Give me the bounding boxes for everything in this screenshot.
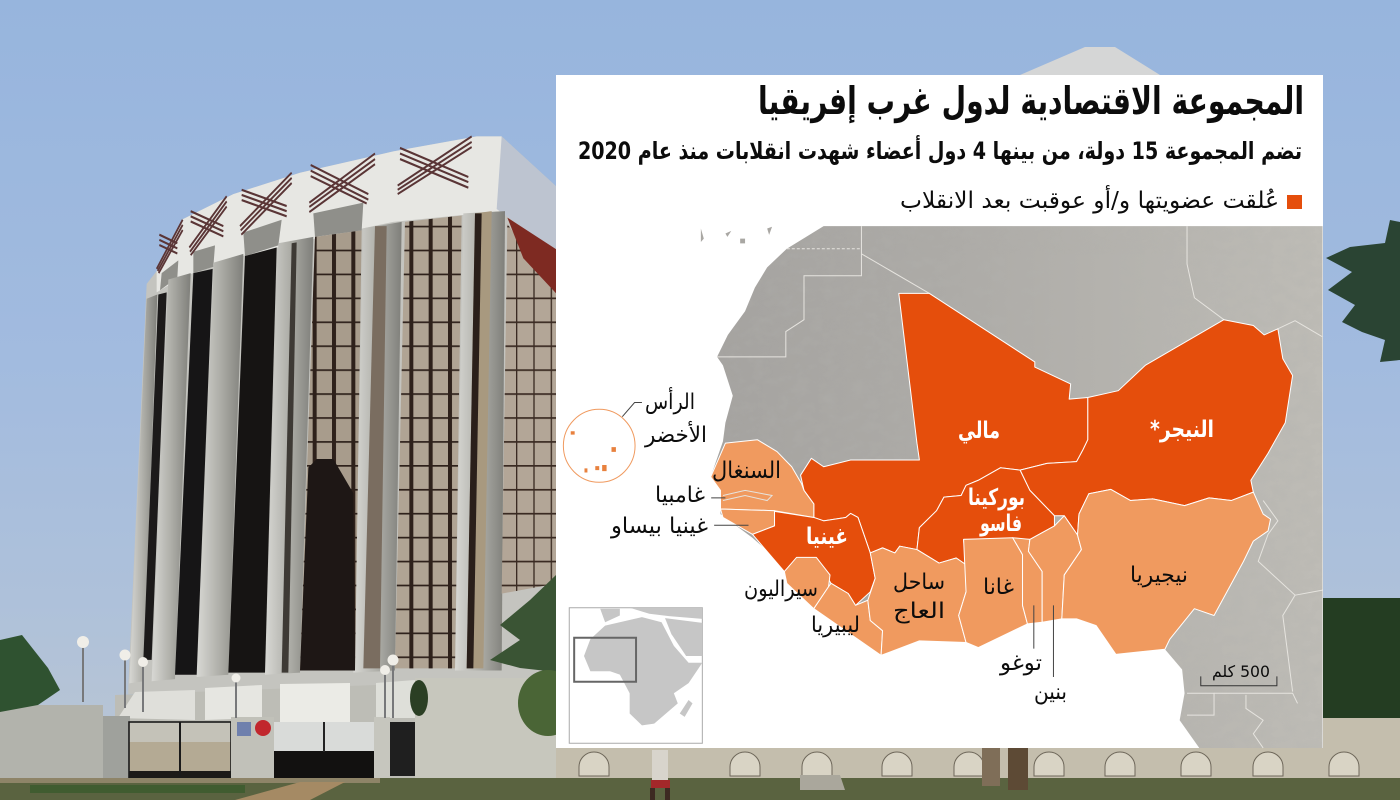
building podium xyxy=(115,678,556,780)
label: Senegal: السنغال xyxy=(712,458,781,484)
label: Nigeria: نيجيريا xyxy=(1130,563,1188,588)
country: Togo xyxy=(1013,538,1042,624)
Gambia river xyxy=(723,490,772,501)
label: Ghana: غانا xyxy=(983,575,1014,600)
locator inset xyxy=(569,608,702,743)
label: Gambia: غامبيا xyxy=(655,483,705,508)
x patterns xyxy=(157,136,472,273)
label: Guinea-Bissau: غينيا بيساو xyxy=(610,514,708,539)
map xyxy=(562,226,1323,748)
label: Ivory Coast: ساحل xyxy=(893,570,945,595)
background photo: ground xyxy=(0,778,1400,800)
country: Guinea-Bissau xyxy=(721,509,775,534)
pillars xyxy=(129,295,157,683)
country: Niger xyxy=(1020,320,1293,535)
lamps xyxy=(77,636,398,718)
label: Cape Verde: الأخضر xyxy=(644,421,707,448)
label: Togo: توغو xyxy=(999,651,1042,676)
label: Ivory Coast xyxy=(893,570,945,624)
country: Sierra Leone xyxy=(784,557,830,609)
country: Burkina Faso xyxy=(917,468,1054,565)
tree in front of building xyxy=(410,575,578,736)
red roof xyxy=(507,218,560,298)
country: Senegal and Gambia xyxy=(711,440,814,517)
gate one xyxy=(129,722,231,778)
borders of non-member countries xyxy=(717,226,1323,748)
person xyxy=(650,750,670,800)
background photo: left tree xyxy=(0,635,60,712)
label: Liberia: ليبيريا xyxy=(811,613,860,638)
soffits xyxy=(160,203,363,290)
country: Guinea xyxy=(752,511,875,605)
label: Burkina Faso: فاسو xyxy=(979,511,1022,537)
label: Burkina Faso: بوركينا xyxy=(968,485,1025,511)
label: Sierra Leone: سيراليون xyxy=(744,577,818,602)
country: Mali xyxy=(801,293,1088,553)
cape verde circle xyxy=(563,409,635,482)
gate two xyxy=(274,722,374,778)
scale bar xyxy=(1201,676,1277,686)
legend swatch xyxy=(1287,195,1302,209)
country: Nigeria xyxy=(1062,489,1271,654)
country: Ghana xyxy=(959,538,1027,648)
gate three xyxy=(390,722,415,776)
label: Guinea: غينيا xyxy=(806,524,848,550)
country: Benin xyxy=(1028,516,1081,622)
parking sign xyxy=(237,722,251,736)
label: Cape Verde: الرأس xyxy=(645,387,695,415)
panel: infographic card xyxy=(556,75,1323,748)
legend xyxy=(900,185,1302,214)
background photo: lower wall with arches xyxy=(556,718,1400,778)
subtitle: تضم المجموعة 15 دولة، من بينها 4 دول أعضاء شهدت انقلابات منذ عام 2020 xyxy=(578,135,1302,165)
background photo: building xyxy=(128,136,556,694)
top fascia xyxy=(157,136,502,292)
tree trunk and rock xyxy=(800,748,1028,790)
legend text: عُلقت عضويتها و/أو عوقبت بعد الانقلاب xyxy=(900,185,1279,214)
no entry sign xyxy=(255,720,271,736)
background photo: right trees xyxy=(1323,220,1400,722)
land base xyxy=(711,226,1323,748)
background photo: roof behind panel xyxy=(1020,47,1160,75)
label: Cape Verde xyxy=(644,387,707,448)
land terrain texture xyxy=(556,220,1326,750)
perimeter wall and gates xyxy=(0,678,556,778)
label: Mali: مالي xyxy=(958,418,1000,444)
leader lines xyxy=(622,403,1053,677)
windows xyxy=(143,292,167,660)
side roof xyxy=(497,136,560,254)
label: Niger: النيجر* xyxy=(1150,417,1214,443)
label: Benin: بنين xyxy=(1034,680,1067,705)
label: Ivory Coast: العاج xyxy=(893,599,945,624)
country: Ivory Coast xyxy=(868,546,966,655)
country: Liberia xyxy=(814,583,883,655)
label: scale: 500 كلم xyxy=(1212,662,1270,681)
label: Burkina Faso xyxy=(968,485,1025,537)
building body xyxy=(128,136,560,694)
canary islands xyxy=(701,227,772,243)
